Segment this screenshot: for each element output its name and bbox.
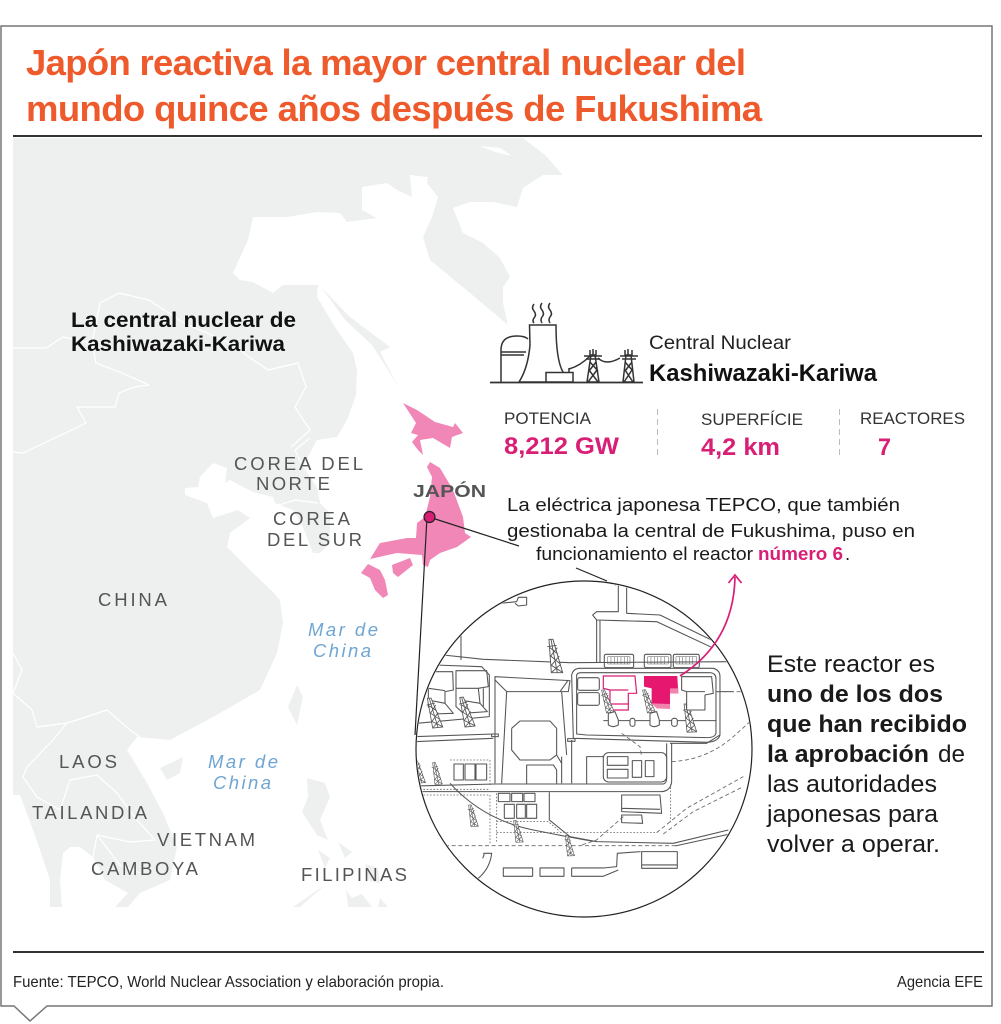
label: China: CHINA [98, 589, 168, 610]
map subtitle: Kashiwazaki-Kariwa [71, 332, 286, 356]
stat: potencia: POTENCIA [504, 409, 592, 428]
map of East Asia [13, 138, 563, 907]
stat: superficie [701, 410, 803, 461]
plant name bold: Kashiwazaki-Kariwa [649, 360, 878, 387]
island: Sakhalin [322, 288, 400, 390]
label: Corea del Sur: DEL SUR [267, 529, 362, 550]
roads [415, 584, 733, 878]
text block: TEPCO: . [845, 543, 850, 564]
label: Tailandia: TAILANDIA [32, 802, 148, 823]
label: Corea del Norte: NORTE [256, 473, 330, 494]
hatched sheds [604, 654, 699, 668]
text block: reactor approval [766, 651, 967, 858]
text block: reactor approval: la aprobación [767, 741, 929, 768]
coastal sliver [480, 146, 512, 156]
islands: Taiwan, Hainan, Philippines [160, 685, 388, 907]
stat: superficie: SUPERFÍCIE [701, 410, 803, 429]
text block: TEPCO: funcionamiento el reactor [536, 543, 753, 564]
reactor 5 pink outline [603, 676, 637, 710]
dashed lines [420, 692, 750, 846]
title: Japón reactiva la mayor central nuclear del [26, 42, 746, 83]
stat: potencia: 8,212 GW [504, 433, 620, 460]
stat: reactores: 7 [878, 434, 891, 461]
text block: TEPCO: gestionaba la central de Fukushima, puso en [507, 520, 915, 541]
map subtitle: La central nuclear de [71, 308, 296, 332]
text block: TEPCO [507, 494, 915, 564]
credit: Agencia EFE [897, 974, 983, 991]
callout lines from Japan to zoom circle [415, 517, 607, 735]
label: Mar de China (south): China [213, 772, 271, 793]
label: Camboya: CAMBOYA [91, 858, 199, 879]
land mass [13, 138, 563, 907]
title rule [13, 135, 982, 137]
footer rule [13, 951, 984, 953]
stat: potencia [504, 409, 620, 460]
text block: reactor approval: Este reactor es [767, 651, 935, 678]
cooling units [600, 689, 677, 727]
label: Mar de China (east): China [313, 640, 371, 661]
text block: reactor approval: que han recibido [767, 711, 967, 738]
text block: reactor approval: volver a operar. [767, 831, 940, 858]
label: Filipinas: FILIPINAS [301, 864, 407, 885]
arrow: reactor 6 [680, 575, 742, 676]
label: Vietnam: VIETNAM [157, 829, 255, 850]
text block: reactor approval: las autoridades [767, 771, 937, 798]
icon: nuclear plant [490, 303, 643, 382]
label: Laos: LAOS [59, 751, 117, 772]
map subtitle [71, 308, 296, 356]
text block: reactor approval: de [938, 741, 965, 768]
label: Mar de China (east): Mar de [308, 619, 378, 640]
plant name: Central Nuclear [649, 333, 792, 354]
source: Fuente: TEPCO, World Nuclear Association y elaboración propia. [13, 974, 444, 991]
Japan [361, 403, 471, 598]
label: Mar de China (south): Mar de [208, 751, 278, 772]
text block: reactor approval: uno de los dos [767, 681, 943, 708]
stat: superficie: 4,2 km [701, 434, 780, 461]
zoom circle: plant site plan [413, 581, 752, 917]
small buildings [454, 678, 677, 876]
country borders [13, 293, 318, 873]
location marker: Kashiwazaki-Kariwa [424, 512, 435, 522]
label: Japón: JAPÓN [413, 480, 486, 501]
reactor 7 outline [682, 677, 713, 710]
pylons [413, 639, 697, 856]
stat: reactores [860, 409, 965, 461]
stat: reactores: REACTORES [860, 409, 965, 428]
left reactor blocks [428, 671, 488, 714]
reactor 6 highlighted [644, 676, 678, 709]
text block: reactor approval: japonesas para [766, 801, 939, 828]
label: Corea del Norte: COREA DEL [234, 453, 363, 474]
label: Corea del Sur: COREA [273, 508, 351, 529]
title: mundo quince años después de Fukushima [26, 88, 763, 129]
text block: TEPCO: número 6 [758, 543, 843, 564]
text block: TEPCO: La eléctrica japonesa TEPCO, que también [507, 494, 900, 515]
